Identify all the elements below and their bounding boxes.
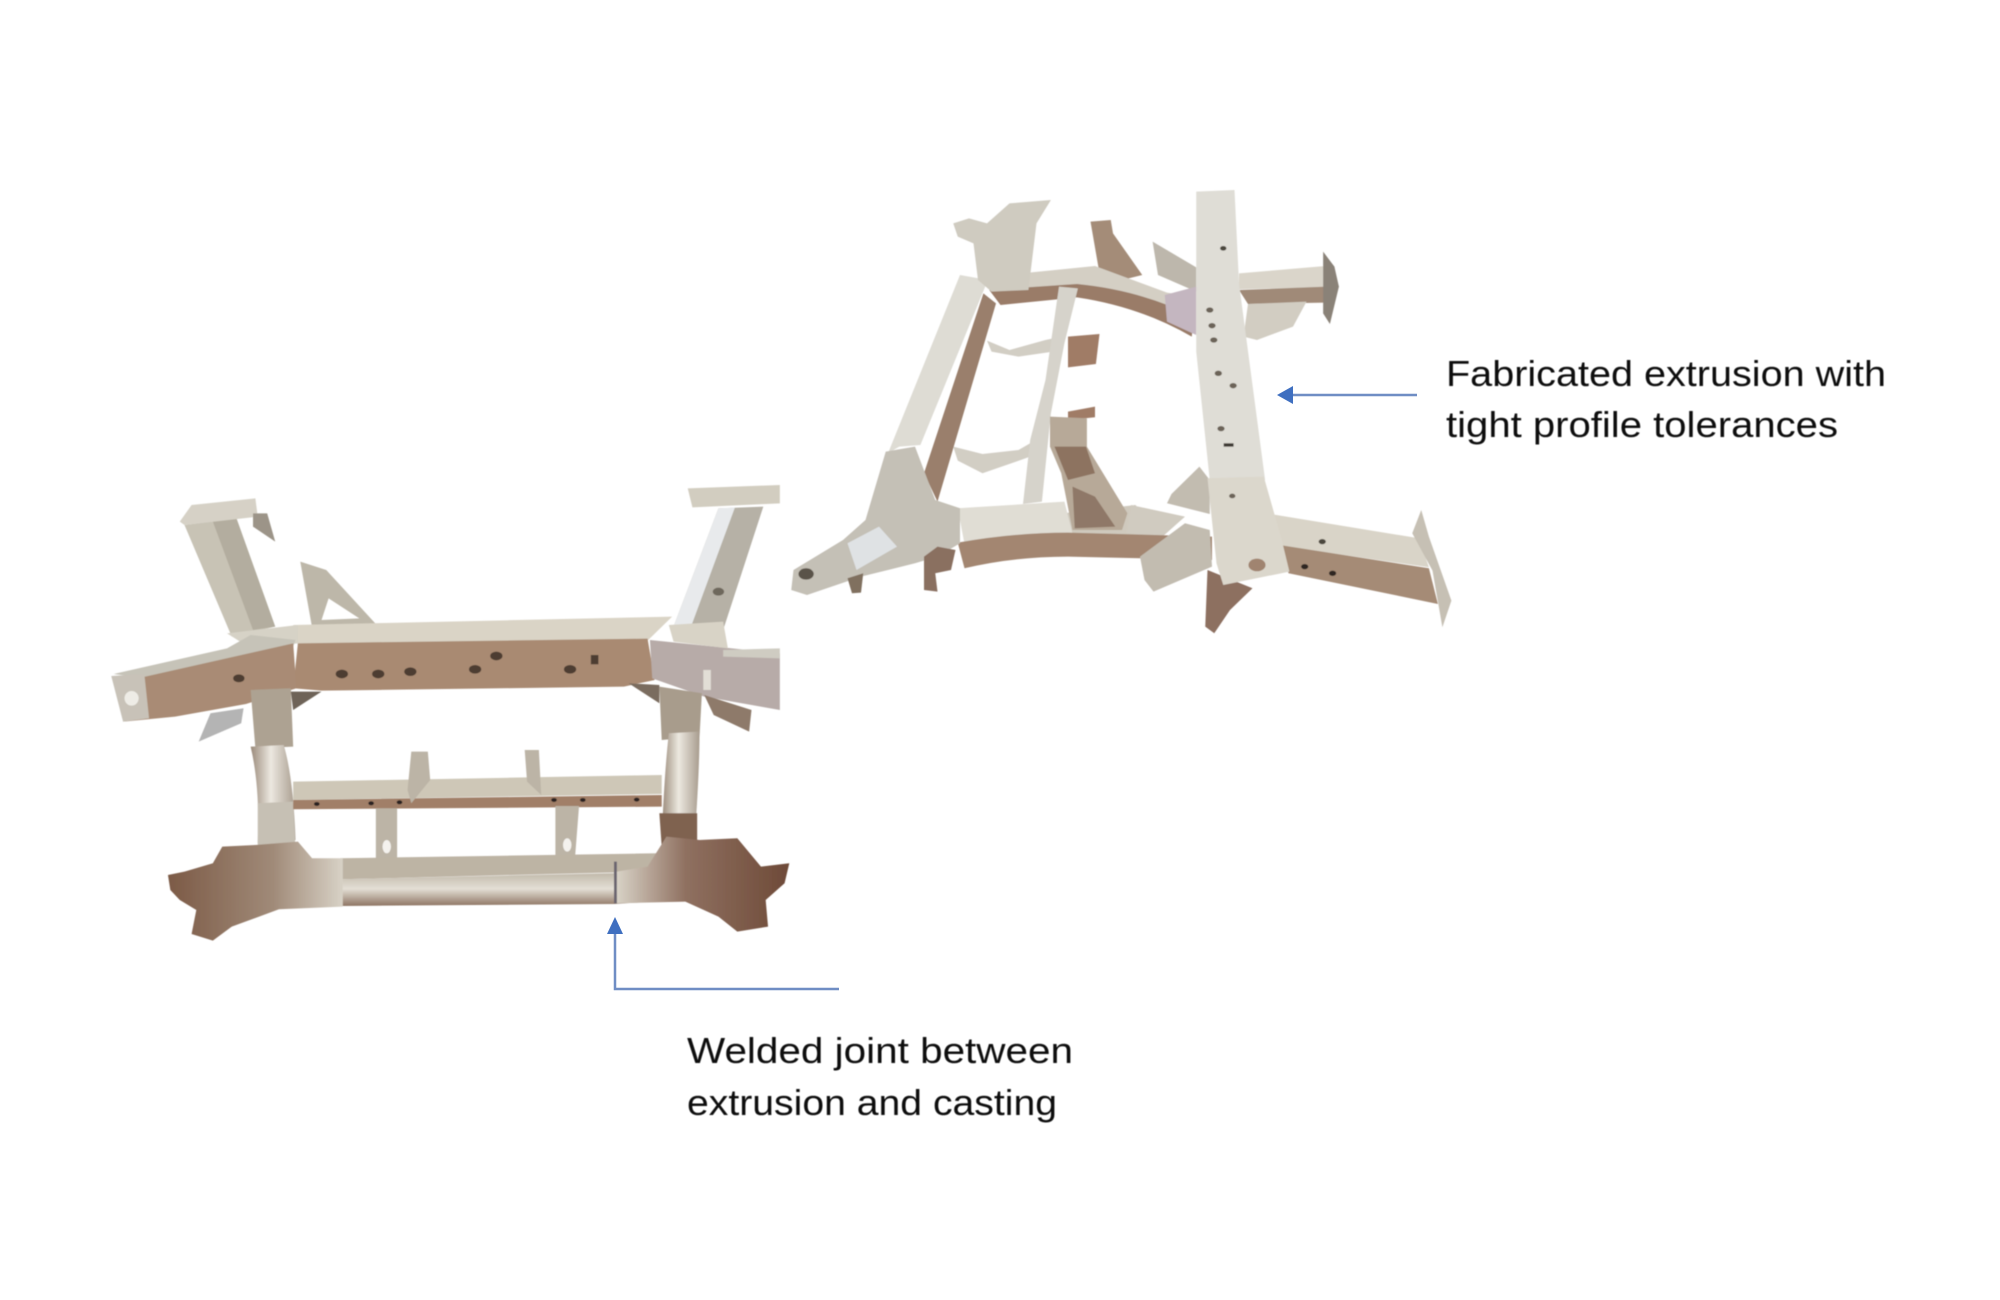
rear arm at upper right bbox=[1239, 252, 1339, 340]
lower plate with bolt bbox=[1208, 477, 1289, 585]
upper bracket bbox=[1090, 220, 1142, 280]
middle tower bracket bbox=[1050, 417, 1127, 530]
welded joint seam bbox=[614, 862, 617, 903]
arrow: pointing at fabricated extrusion bbox=[1277, 386, 1417, 404]
side bracket bbox=[1153, 242, 1196, 292]
photo: angled view fabricated extrusion subframe bbox=[791, 190, 1451, 633]
lower tube extrusion bbox=[340, 853, 681, 906]
long left rail with channel bbox=[888, 275, 996, 502]
callout: welded joint: extrusion and casting bbox=[687, 1082, 1057, 1123]
lower right arm bbox=[1266, 510, 1451, 627]
right cast end bbox=[617, 837, 789, 932]
arrow: pointing at welded joint bbox=[607, 917, 839, 989]
callout: welded joint: Welded joint between bbox=[687, 1030, 1073, 1071]
lower verticals bbox=[251, 683, 702, 852]
left arm bbox=[111, 635, 296, 742]
left cast end bbox=[168, 842, 343, 941]
top casting bbox=[953, 200, 1051, 292]
upper and lower mounting tabs bbox=[376, 750, 579, 867]
brown flaps bbox=[1068, 334, 1100, 420]
callout: fabricated extrusion: tight profile tolerances bbox=[1446, 404, 1838, 445]
photo: front view subframe with welded cast ends bbox=[111, 485, 789, 941]
lower left casting bbox=[791, 447, 960, 595]
lower arc light fill bbox=[1064, 505, 1162, 538]
right upright tower bbox=[674, 485, 780, 630]
long right rail bbox=[1196, 190, 1265, 480]
wavy straps bbox=[953, 336, 1064, 473]
left upright tower bbox=[180, 498, 275, 637]
mid cross member bbox=[293, 775, 662, 809]
lower arc member bbox=[958, 502, 1212, 568]
callout: welded joint bbox=[687, 1030, 1073, 1123]
triangular gusset bracket bbox=[300, 562, 376, 627]
cast side brackets bbox=[1140, 467, 1252, 633]
main crossbeam bbox=[227, 617, 672, 691]
callout: fabricated extrusion bbox=[1446, 353, 1886, 445]
right arm bbox=[650, 622, 780, 732]
thin cross strut bbox=[1023, 287, 1078, 504]
top arc member bbox=[989, 266, 1196, 337]
callout: fabricated extrusion: Fabricated extrusion with bbox=[1446, 353, 1886, 394]
